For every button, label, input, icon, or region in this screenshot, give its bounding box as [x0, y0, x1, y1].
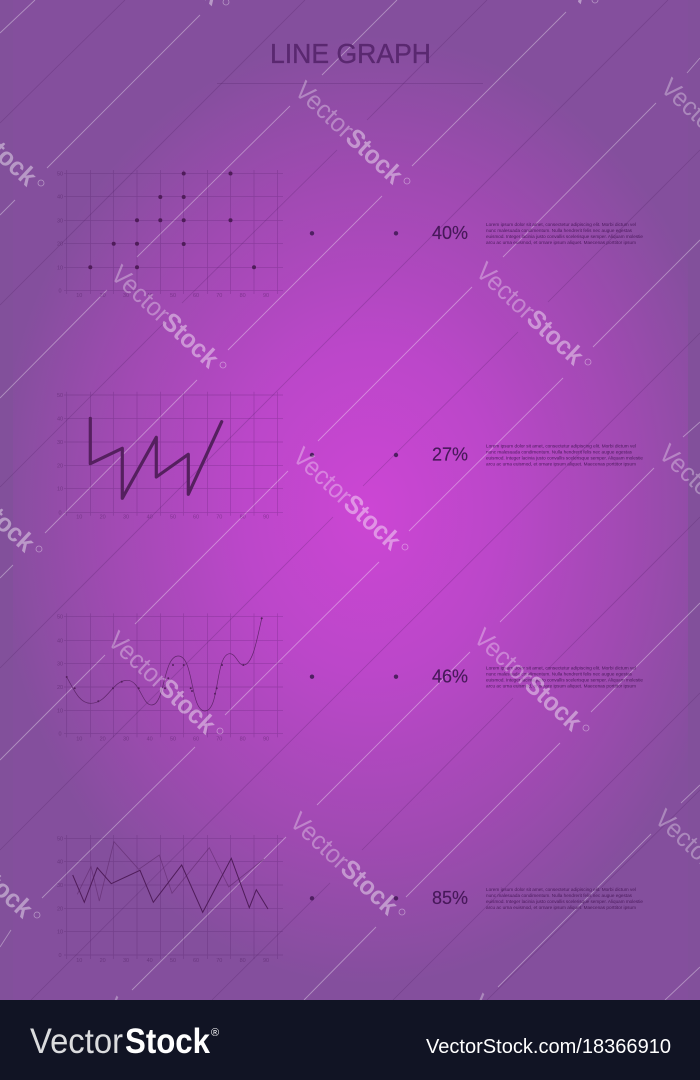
y axis labels chart 1: 20	[57, 242, 63, 248]
row 1 description: arcu ac urna euismod, et ornare ipsum aliquet. Maecenas porttitor ipsum	[486, 240, 636, 246]
smooth curve	[67, 618, 262, 711]
footer logo: Vector	[30, 1022, 123, 1061]
x axis labels chart 3: 20	[100, 736, 106, 742]
x axis labels chart 3: 30	[123, 736, 129, 742]
watermarks: VectorStock	[102, 625, 222, 740]
row 3 description: euismod. Integer lacinia justo convallis scelerisque semper. Aliquam molestie	[486, 677, 643, 683]
x axis labels chart 1: 60	[193, 293, 199, 299]
x axis labels chart 2: 90	[263, 515, 269, 521]
y axis labels chart 1: 10	[57, 265, 63, 271]
x axis labels chart 4: 30	[123, 958, 129, 964]
x axis labels chart 4: 60	[193, 958, 199, 964]
row 1 description: euismod. Integer lacinia justo convallis scelerisque semper. Aliquam molestie	[486, 234, 643, 240]
watermark registered marks	[34, 0, 598, 918]
x axis labels chart 2: 50	[170, 515, 176, 521]
x axis labels chart 3: 80	[240, 736, 246, 742]
dark series line	[73, 858, 268, 912]
row 2 description: nunc malesuada condimentum. Nulla hendrerit felis nec augue egestas	[486, 450, 633, 456]
panel: chart 3 smooth curve	[57, 613, 283, 742]
y axis labels chart 2: 40	[57, 416, 63, 422]
y axis labels chart 3: 40	[57, 638, 63, 644]
row 1 description: nunc malesuada condimentum. Nulla hendrerit felis nec augue egestas	[486, 228, 633, 234]
x axis labels chart 3: 60	[193, 736, 199, 742]
row 3 description	[486, 665, 643, 689]
x axis labels chart 2: 80	[240, 515, 246, 521]
x axis labels chart 4	[76, 958, 269, 964]
y axis labels chart 4	[57, 836, 63, 959]
panel: chart 1 dot plot	[57, 170, 283, 299]
row 3 connector dots	[310, 674, 398, 679]
x axis labels chart 1: 50	[170, 293, 176, 299]
y axis labels chart 3: 30	[57, 662, 63, 668]
row 2 description: arcu ac urna euismod, et ornare ipsum aliquet. Maecenas porttitor ipsum	[486, 462, 636, 468]
row 4 description: euismod. Integer lacinia justo convallis scelerisque semper. Aliquam molestie	[486, 899, 643, 905]
x axis labels chart 3: 50	[170, 736, 176, 742]
y axis labels chart 2: 20	[57, 463, 63, 469]
x axis labels chart 1: 80	[240, 293, 246, 299]
x axis labels chart 4: 70	[216, 958, 222, 964]
row 4 description: Lorem ipsum dolor sit amet, consectetur adipiscing elit. Morbi dictum vel	[486, 887, 636, 893]
x axis labels chart 2: 30	[123, 515, 129, 521]
x axis labels chart 4: 80	[240, 958, 246, 964]
x axis labels chart 3: 70	[216, 736, 222, 742]
y axis labels chart 4: 30	[57, 883, 63, 889]
row 3 description: arcu ac urna euismod, et ornare ipsum aliquet. Maecenas porttitor ipsum	[486, 683, 636, 689]
y axis labels chart 1: 30	[57, 218, 63, 224]
x axis labels chart 4: 50	[170, 958, 176, 964]
x axis labels chart 3	[76, 736, 269, 742]
y axis labels chart 2	[57, 393, 63, 516]
x axis labels chart 2: 70	[216, 515, 222, 521]
watermarks: VectorStock	[284, 806, 404, 921]
row 4 description: arcu ac urna euismod, et ornare ipsum aliquet. Maecenas porttitor ipsum	[486, 905, 636, 911]
row 4 percentage: 85%	[432, 888, 468, 908]
row 3 description: Lorem ipsum dolor sit amet, consectetur adipiscing elit. Morbi dictum vel	[486, 665, 636, 671]
row 1 description	[486, 222, 643, 246]
watermarks: VectorStock	[105, 259, 225, 374]
x axis labels chart 2: 60	[193, 515, 199, 521]
row 4 connector dots	[310, 896, 398, 900]
row 1 percentage: 40%	[432, 223, 468, 243]
x axis labels chart 1: 40	[147, 293, 153, 299]
panel: chart 4 double line	[57, 835, 283, 964]
y axis labels chart 4: 10	[57, 930, 63, 936]
x axis labels chart 3: 40	[147, 736, 153, 742]
x axis labels chart 1	[76, 293, 269, 299]
x axis labels chart 2: 20	[100, 515, 106, 521]
footer image id: VectorStock.com/18366910	[426, 1036, 671, 1058]
x axis labels chart 1: 90	[263, 293, 269, 299]
x axis labels chart 1: 30	[123, 293, 129, 299]
x axis labels chart 4: 40	[147, 958, 153, 964]
row 1 connector dots	[310, 231, 398, 236]
watermarks: VectorStock	[468, 622, 588, 737]
x axis labels chart 2: 10	[76, 515, 82, 521]
footer bar	[0, 1000, 700, 1080]
y axis labels chart 2: 30	[57, 440, 63, 446]
row 1 description: Lorem ipsum dolor sit amet, consectetur adipiscing elit. Morbi dictum vel	[486, 222, 636, 228]
x axis labels chart 4: 10	[76, 958, 82, 964]
data dots chart 1	[88, 172, 256, 269]
x axis labels chart 4: 20	[100, 958, 106, 964]
y axis labels chart 1: 0	[58, 289, 62, 295]
y axis labels chart 3: 20	[57, 685, 63, 691]
x axis labels chart 3: 10	[76, 736, 82, 742]
watermarks: VectorStock	[287, 441, 407, 556]
y axis labels chart 4: 40	[57, 860, 63, 866]
y axis labels chart 3	[57, 615, 63, 738]
panel: chart 2 thick zigzag line	[57, 392, 283, 521]
curve points	[66, 617, 263, 702]
row 4 description: nunc malesuada condimentum. Nulla hendrerit felis nec augue egestas	[486, 893, 633, 899]
y axis labels chart 2: 10	[57, 487, 63, 493]
y axis labels chart 1	[57, 171, 63, 295]
row 4 description	[486, 887, 643, 911]
row 3 description: nunc malesuada condimentum. Nulla hendrerit felis nec augue egestas	[486, 671, 633, 677]
row 2 connector dots	[310, 453, 398, 457]
row 2 percentage: 27%	[432, 445, 468, 465]
x axis labels chart 1: 20	[100, 293, 106, 299]
row 2 description: Lorem ipsum dolor sit amet, consectetur adipiscing elit. Morbi dictum vel	[486, 444, 636, 450]
row 3 percentage: 46%	[432, 666, 468, 686]
watermarks: VectorStock	[470, 256, 590, 371]
y axis labels chart 4: 50	[57, 836, 63, 842]
footer logo: Stock	[125, 1022, 210, 1061]
title underline	[217, 82, 483, 84]
footer logo	[30, 1022, 219, 1061]
y axis labels chart 4: 0	[58, 953, 62, 959]
x axis labels chart 4: 90	[263, 958, 269, 964]
watermarks: VectorStock	[289, 75, 409, 190]
y axis labels chart 1: 40	[57, 195, 63, 201]
y axis labels chart 1: 50	[57, 171, 63, 177]
y axis labels chart 4: 20	[57, 906, 63, 912]
y axis labels chart 2: 50	[57, 393, 63, 399]
y axis labels chart 3: 10	[57, 708, 63, 714]
row 2 description	[486, 444, 643, 468]
footer logo: ®	[211, 1027, 219, 1039]
zigzag line	[90, 418, 222, 498]
x axis labels chart 2: 40	[147, 515, 153, 521]
light series line	[77, 842, 264, 901]
y axis labels chart 3: 0	[58, 732, 62, 738]
x axis labels chart 1: 10	[76, 293, 82, 299]
row 2 description: euismod. Integer lacinia justo convallis scelerisque semper. Aliquam molestie	[486, 456, 643, 462]
x axis labels chart 2	[76, 515, 269, 521]
y axis labels chart 3: 50	[57, 615, 63, 621]
y axis labels chart 2: 0	[58, 510, 62, 516]
x axis labels chart 1: 70	[216, 293, 222, 299]
x axis labels chart 3: 90	[263, 736, 269, 742]
title: LINE GRAPH	[270, 38, 431, 69]
